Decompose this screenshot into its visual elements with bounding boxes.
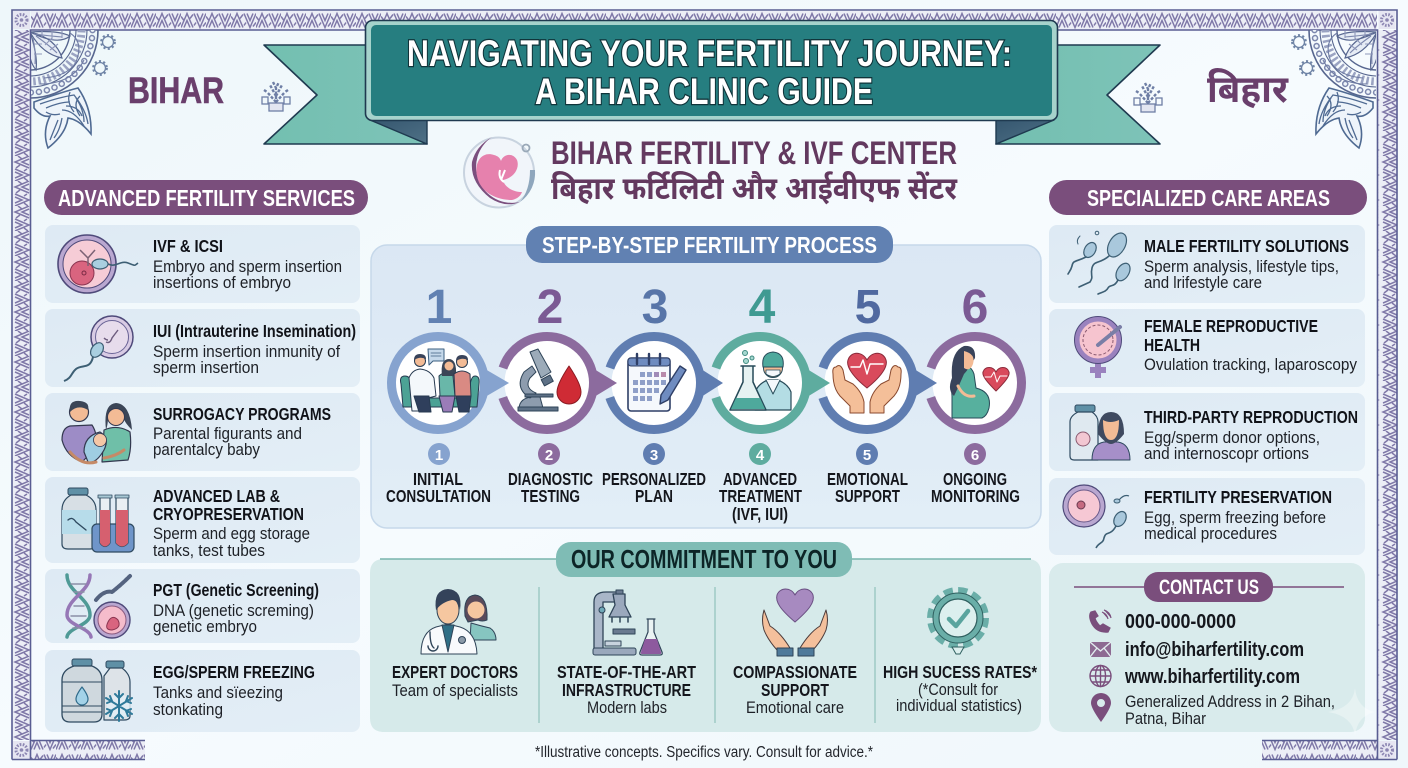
address lines: Patna, Bihar bbox=[1125, 709, 1206, 728]
icon: flask and lab doctor bbox=[730, 350, 791, 410]
icon: location pin bbox=[1091, 693, 1111, 722]
icon: hands holding heart bbox=[762, 589, 828, 656]
commitment: compassionate support text: SUPPORT bbox=[761, 680, 829, 700]
step 4 label: TREATMENT bbox=[719, 486, 802, 506]
icon: bottle and donor woman bbox=[1070, 405, 1130, 460]
contact heading: CONTACT US bbox=[1159, 576, 1259, 599]
card: egg and sperm freezing: Tanks and sïeezing bbox=[153, 683, 283, 702]
commitment: expert doctors text: EXPERT DOCTORS bbox=[392, 662, 518, 682]
corner ornament: top right bbox=[1292, 0, 1408, 148]
card: advanced lab and cryopreservation: Sperm and egg storage bbox=[153, 524, 310, 543]
card: advanced lab and cryopreservation bbox=[45, 477, 360, 563]
icon: egg and sperm bbox=[58, 235, 138, 293]
step numbers: 4 bbox=[749, 281, 776, 334]
step 3 label bbox=[602, 443, 706, 506]
card: male fertility solutions: MALE FERTILITY SOLUTIONS bbox=[1144, 236, 1349, 256]
banner plate bbox=[366, 20, 1058, 120]
card: fertility preservation: medical procedures bbox=[1144, 524, 1277, 543]
card: fertility preservation bbox=[1049, 478, 1365, 555]
step 2 label bbox=[508, 443, 593, 506]
commitment: success rates text: HIGH SUCESS RATES* bbox=[883, 662, 1037, 682]
card: male fertility solutions: and lrifestyle care bbox=[1144, 273, 1262, 292]
step 5 label: 5 bbox=[863, 447, 871, 464]
commitment: success rates text bbox=[883, 662, 1037, 715]
icon: envelope bbox=[1090, 642, 1111, 657]
card: PGT genetic screening: PGT (Genetic Screening) bbox=[153, 580, 319, 600]
card: female reproductive health: Ovulation tracking, laparoscopy bbox=[1144, 355, 1357, 374]
heading: advanced fertility services: ADVANCED FERTILITY SERVICES bbox=[58, 185, 355, 211]
commitment: compassionate support text: Emotional care bbox=[746, 698, 844, 717]
step numbers: 5 bbox=[855, 281, 881, 334]
card: IUI: Sperm insertion inmunity of bbox=[153, 342, 340, 361]
icon: microscope and blood drop bbox=[518, 349, 581, 411]
card: IVF and ICSI: IVF & ICSI bbox=[153, 236, 223, 256]
card: female reproductive health: FEMALE REPRODUCTIVE bbox=[1144, 316, 1318, 336]
card: PGT genetic screening: genetic embryo bbox=[153, 617, 257, 636]
step 1 label: INITIAL bbox=[413, 469, 463, 489]
step 4 label: ADVANCED bbox=[723, 469, 797, 489]
step 2 label: DIAGNOSTIC bbox=[508, 469, 593, 489]
process heading bbox=[526, 226, 893, 263]
clinic logo bbox=[464, 137, 535, 208]
heading: specialized care areas: SPECIALIZED CARE AREAS bbox=[1087, 185, 1330, 211]
phone number: 000-000-0000 bbox=[1125, 611, 1236, 633]
step 4 label bbox=[719, 443, 802, 524]
left state label: BIHAR: BIHAR bbox=[128, 70, 224, 111]
panel: contact us bbox=[1049, 563, 1375, 736]
card: IUI: sperm insertion bbox=[153, 358, 259, 377]
icon: right emblem bbox=[1134, 83, 1162, 112]
card: fertility preservation: FERTILITY PRESERVATION bbox=[1144, 487, 1332, 507]
clinic name Hindi: बिहार फर्टिलिटी और आईवीएफ सेंटर bbox=[551, 171, 958, 206]
card: egg and sperm freezing: EGG/SPERM FREEZING bbox=[153, 662, 315, 682]
step numbers: 2 bbox=[537, 281, 563, 334]
website address: www.biharfertility.com bbox=[1124, 666, 1300, 688]
icon: left emblem bbox=[262, 82, 290, 111]
card: female reproductive health: HEALTH bbox=[1144, 335, 1200, 355]
icon: globe bbox=[1090, 666, 1111, 686]
card: IUI bbox=[45, 309, 360, 387]
icon: gear with check bbox=[931, 591, 985, 654]
title text: A BIHAR CLINIC GUIDE bbox=[535, 71, 873, 112]
icon: sperm entering egg bbox=[64, 316, 133, 381]
step 6 label: 6 bbox=[971, 447, 979, 464]
card: PGT genetic screening bbox=[45, 569, 360, 643]
icon: pregnant woman with heart bbox=[950, 346, 1009, 418]
contact heading bbox=[1144, 572, 1273, 602]
card: egg and sperm freezing: stonkating bbox=[153, 700, 223, 719]
card: third-party reproduction: Egg/sperm donor options, bbox=[1144, 428, 1320, 447]
step 2 label: 2 bbox=[545, 447, 553, 464]
step 4 label: (IVF, IUI) bbox=[732, 504, 788, 524]
email address: info@biharfertility.com bbox=[1125, 639, 1304, 661]
card: third-party reproduction bbox=[1049, 393, 1365, 471]
card: advanced lab and cryopreservation: ADVANCED LAB & bbox=[153, 486, 280, 506]
icon: three sperm bbox=[1068, 230, 1133, 294]
step 3 label: PERSONALIZED bbox=[602, 469, 706, 489]
commitment: infrastructure text: Modern labs bbox=[587, 698, 667, 717]
icon: female symbol and ovary bbox=[1074, 316, 1122, 378]
footer disclaimer: *Illustrative concepts. Specifics vary. Consult for advice.* bbox=[535, 744, 873, 761]
commitment: infrastructure text: STATE-OF-THE-ART bbox=[557, 662, 696, 682]
commitment: success rates text: (*Consult for bbox=[918, 680, 998, 699]
step rings bbox=[392, 336, 1022, 430]
icon: hands with heart bbox=[833, 353, 901, 413]
step 1 label bbox=[386, 443, 491, 506]
right ribbon fold bbox=[996, 120, 1054, 144]
icon: freezing tanks and snowflake bbox=[62, 659, 132, 722]
decorative sparkle bbox=[1328, 688, 1375, 736]
step 6 label: MONITORING bbox=[931, 486, 1020, 506]
card: male fertility solutions: Sperm analysis, lifestyle tips, bbox=[1144, 257, 1339, 276]
card: IVF and ICSI: insertions of embryo bbox=[153, 273, 291, 292]
card: advanced lab and cryopreservation: tanks, test tubes bbox=[153, 541, 265, 560]
step 3 label: 3 bbox=[650, 447, 658, 464]
step 4 label: 4 bbox=[756, 447, 765, 464]
address lines: Generalized Address in 2 Bihan, bbox=[1125, 692, 1335, 711]
step 5 label: SUPPORT bbox=[835, 486, 900, 506]
card: fertility preservation: Egg, sperm freezing before bbox=[1144, 508, 1326, 527]
icon: phone bbox=[1090, 610, 1111, 632]
process heading: STEP-BY-STEP FERTILITY PROCESS bbox=[542, 232, 877, 258]
card: IVF and ICSI: Embryo and sperm insertion bbox=[153, 257, 342, 276]
card: PGT genetic screening: DNA (genetic screming) bbox=[153, 601, 314, 620]
commitment heading bbox=[556, 542, 852, 577]
card: IVF and ICSI bbox=[45, 225, 360, 303]
step 2 label: TESTING bbox=[521, 486, 580, 506]
icon: microscope and flask bbox=[593, 590, 662, 655]
icon: parents with baby bbox=[62, 401, 132, 463]
icon: DNA and embryo bbox=[67, 575, 130, 638]
panel: our commitment to you bbox=[370, 542, 1041, 732]
commitment: compassionate support text bbox=[733, 662, 857, 717]
card: surrogacy programs: parentalcy baby bbox=[153, 440, 260, 459]
address lines bbox=[1125, 692, 1335, 728]
step 5 label: EMOTIONAL bbox=[827, 469, 908, 489]
title text bbox=[407, 33, 1012, 112]
corner ornament: top left bbox=[0, 0, 114, 148]
step 1 label: CONSULTATION bbox=[386, 486, 491, 506]
step 6 label bbox=[931, 443, 1020, 506]
icon: calendar and pen bbox=[628, 354, 686, 411]
step numbers: 3 bbox=[642, 281, 668, 334]
title text: NAVIGATING YOUR FERTILITY JOURNEY: bbox=[407, 33, 1012, 74]
left ribbon fold bbox=[370, 120, 427, 144]
right state label: Bihar in Hindi: बिहार bbox=[1207, 67, 1289, 111]
card: surrogacy programs bbox=[45, 393, 360, 471]
icon: consultation on sofa bbox=[400, 349, 479, 412]
icon: egg and sperm bbox=[1063, 485, 1129, 548]
title banner bbox=[264, 20, 1160, 144]
commitment heading: OUR COMMITMENT TO YOU bbox=[571, 544, 837, 574]
commitment: compassionate support text: COMPASSIONATE bbox=[733, 662, 857, 682]
card: advanced lab and cryopreservation: CRYOPRESERVATION bbox=[153, 504, 304, 524]
step 3 label: PLAN bbox=[635, 486, 673, 506]
heading: advanced fertility services bbox=[44, 180, 368, 215]
panel: step-by-step fertility process bbox=[371, 226, 1041, 528]
step numbers bbox=[426, 281, 988, 334]
clinic name English: BIHAR FERTILITY & IVF CENTER bbox=[551, 135, 957, 171]
right ribbon tail bbox=[996, 45, 1160, 144]
dividers bbox=[539, 587, 875, 723]
commitment: expert doctors text: Team of specialists bbox=[392, 681, 518, 700]
step numbers: 6 bbox=[962, 281, 988, 334]
step 1 label: 1 bbox=[435, 447, 443, 464]
step 5 label bbox=[827, 443, 908, 506]
card: egg and sperm freezing bbox=[45, 650, 360, 732]
step circle backgrounds bbox=[396, 340, 1018, 426]
card: surrogacy programs: SURROGACY PROGRAMS bbox=[153, 404, 331, 424]
icon: storage bottle and test tubes bbox=[62, 488, 134, 552]
card: surrogacy programs: Parental figurants and bbox=[153, 424, 302, 443]
card: third-party reproduction: and internoscopr ortions bbox=[1144, 444, 1309, 463]
commitment: success rates text: individual statistics) bbox=[896, 696, 1022, 715]
icon: expert doctors bbox=[421, 589, 496, 654]
step arrows bbox=[485, 369, 937, 397]
commitment: infrastructure text bbox=[557, 662, 696, 717]
card: female reproductive health bbox=[1049, 309, 1365, 387]
step 6 label: ONGOING bbox=[943, 469, 1007, 489]
card: third-party reproduction: THIRD-PARTY REPRODUCTION bbox=[1144, 407, 1358, 427]
card: male fertility solutions bbox=[1049, 225, 1365, 303]
left ribbon tail bbox=[264, 45, 427, 144]
commitment: infrastructure text: INFRASTRUCTURE bbox=[562, 680, 691, 700]
step numbers: 1 bbox=[426, 281, 452, 334]
card: IUI: IUI (Intrauterine Insemination) bbox=[153, 321, 356, 341]
heading: specialized care areas bbox=[1049, 180, 1367, 215]
commitment: expert doctors text bbox=[392, 662, 518, 700]
